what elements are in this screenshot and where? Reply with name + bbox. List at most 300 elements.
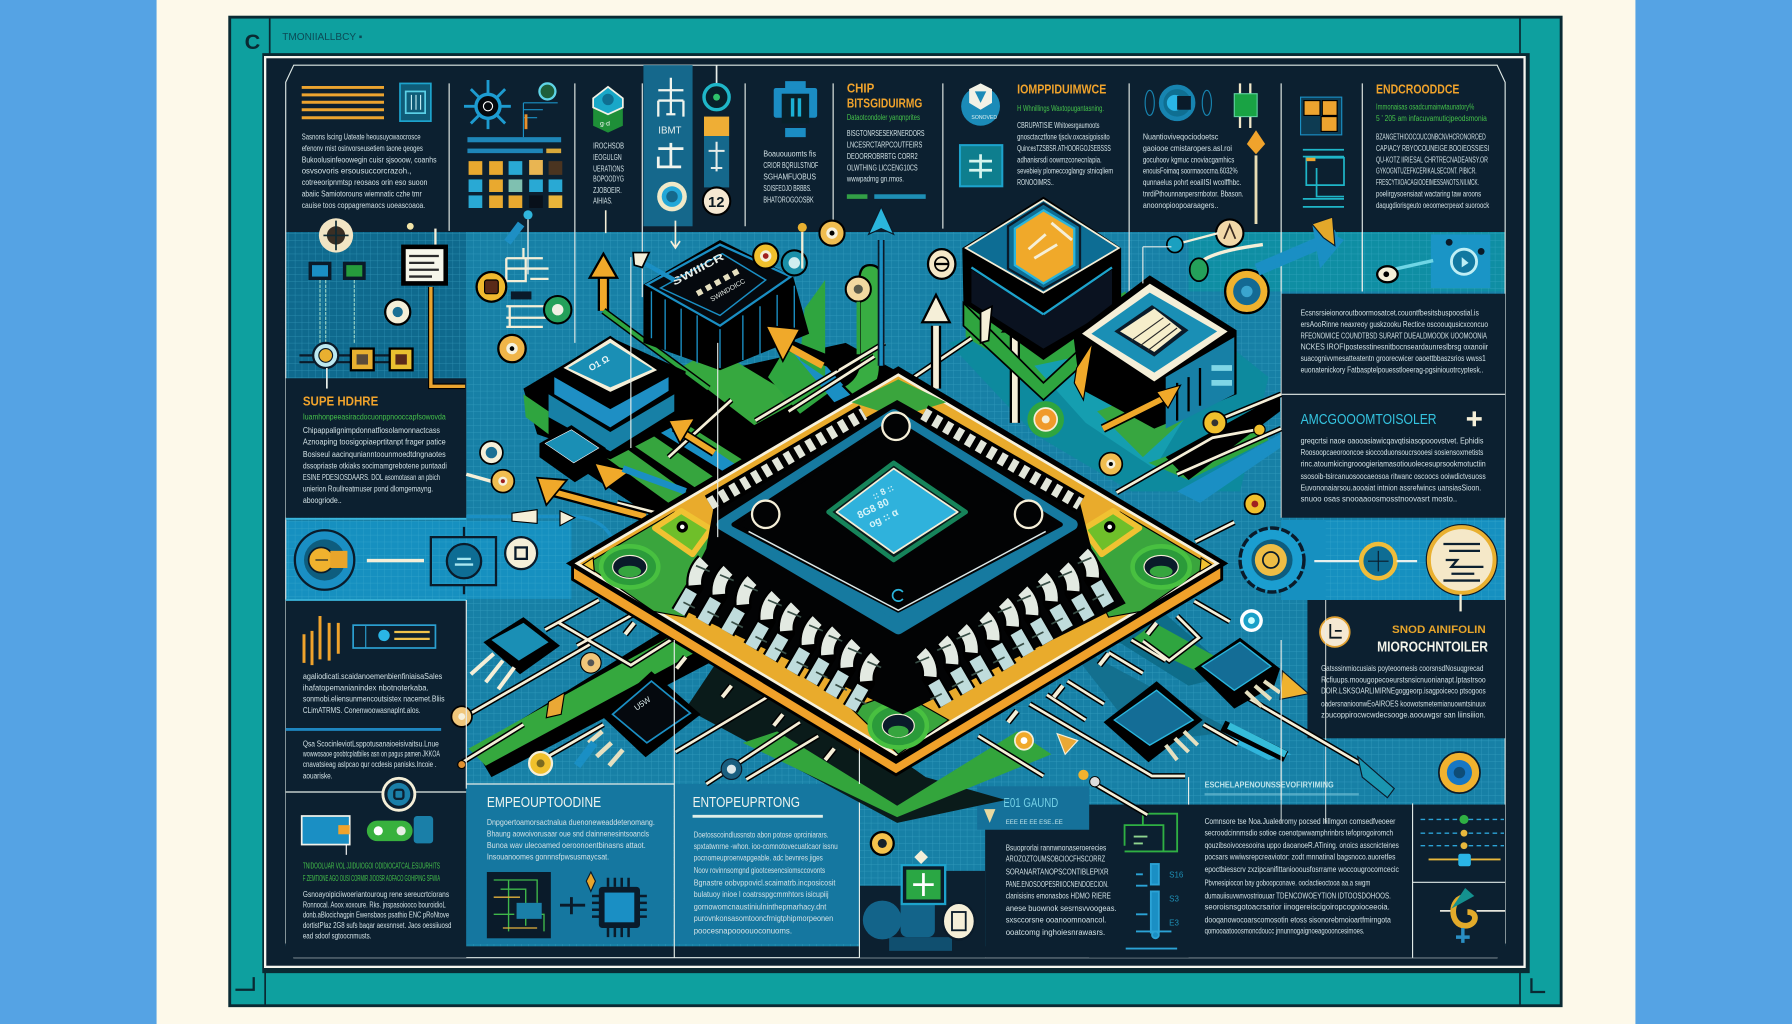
body text: Chipappalignimpdonnatfiosolamonnactcass <box>303 425 441 435</box>
lid highlight <box>749 531 1046 610</box>
green traces right field <box>949 286 1280 503</box>
body text: Insouanoomes gonnnsfpwsusmaycsat. <box>487 851 609 861</box>
icon: gold coin <box>477 272 506 302</box>
panel: right text one <box>1281 294 1505 394</box>
arrow: orange long right <box>1103 385 1181 429</box>
ring cream <box>1216 219 1243 247</box>
icons: rings above switcher <box>753 207 1026 423</box>
arrow small <box>1057 734 1078 754</box>
icon: hex block <box>962 197 1126 400</box>
icon: cream tag <box>981 306 992 343</box>
body text <box>303 425 447 505</box>
inner panel border <box>265 57 1525 967</box>
heading: SUPE HDHRE <box>303 395 378 409</box>
body text: adhanisrsdi oowmzconecnlapia. <box>1017 154 1102 164</box>
body text: Gatsssinmiocusiais poyteoomesis coorsnsdNosuqgrecad <box>1321 663 1484 673</box>
ring gold blue <box>1225 270 1269 313</box>
green caption: TNIDOOLUAR VOL JJIDUIOGOI ODIDIOCATCAL.ESIJURHITS <box>303 862 440 871</box>
icon: gold ring right two <box>1099 453 1122 475</box>
body text: Bunoa wav ulecoamed oeroonoentbinasns attaot. <box>487 840 646 850</box>
body text: rinc.atoumkicingrooogieriamasotiouolecesuprsookmotuctiin <box>1301 458 1486 468</box>
corner tags <box>583 558 1211 571</box>
ring orange small <box>1015 731 1033 750</box>
block: endcroodce: 5 ' 205 am infacuvamuticjpeodsmonia <box>1376 114 1487 123</box>
body text: QU-KOTZ IIRIESAL CHRTRECNADEANSY.OR <box>1376 154 1488 164</box>
ring yellow pair <box>1078 770 1100 787</box>
icon: blue badge: SONOVED <box>971 115 997 121</box>
ring amber top <box>819 221 845 246</box>
icon: blue box <box>704 136 729 187</box>
body text: Roosoopcaeorooncoe sioccoduonsoucrsooesi sosiensoxmetists <box>1301 447 1484 457</box>
ring oval <box>928 249 955 279</box>
heading: EMPEOUPTOODINE <box>487 795 601 811</box>
ring gold <box>753 243 778 269</box>
board pin stubs <box>625 623 1157 760</box>
subheading: SNOD AINIFOLIN <box>1392 624 1486 636</box>
chip label: U5W <box>633 695 653 712</box>
gold tip <box>1312 217 1335 246</box>
icon: blue pin <box>507 210 533 274</box>
body text: seoroisnsgotoacrsarior iinogereiscigoiropcogoioceeoia. <box>1205 902 1390 912</box>
teal frame <box>230 17 1561 1006</box>
connector <box>466 515 509 518</box>
arrow cream up two <box>1003 320 1026 423</box>
body text: ihafatopemanianindex nbotnoterkaba. <box>303 682 429 692</box>
body text: FRESCYTXOACAGIOOEIMESSANOTS.NII.MCK. <box>1376 177 1479 187</box>
ring gold teal <box>1240 609 1263 632</box>
body text: SOISFEOJO BRBBS. <box>763 183 811 193</box>
arrow: orange long <box>537 478 646 517</box>
body text: pocsars wwiwsrepcreaviotor: zodt mnnatinal bagsnoco.auoretfes <box>1205 851 1396 861</box>
body text: sonmobi.eliensunmencoutsistex nacemet.Bliis <box>303 694 445 704</box>
icon: red tag <box>546 693 565 718</box>
inner thin outline <box>286 65 1505 958</box>
body text: abaiic Samiotorouns wiemnatic czhe tmr <box>302 189 422 199</box>
body text: PANE.ENOSOOPESRIIOCNENDOECION. <box>1006 879 1109 889</box>
ring cream <box>846 277 871 354</box>
chip label: O1 Ω <box>587 353 611 373</box>
icon: target <box>295 530 354 590</box>
ring small <box>458 761 466 769</box>
icon: plus <box>1467 411 1482 426</box>
icon: module <box>302 816 350 855</box>
green corner bottom <box>851 691 949 754</box>
icon: spark <box>586 872 595 891</box>
icon: document chip <box>1073 275 1237 429</box>
body text: qouzibsoivocesooina uppo daoanoeR.ATining. onoics asscnicteines <box>1205 840 1399 850</box>
body text: daqugdiorisgeuto oeoomecrpeaxt suoroock <box>1376 200 1490 210</box>
icon: timeline dots <box>1421 815 1504 866</box>
panel: left bottom blue card <box>466 784 673 944</box>
icon: square badge <box>505 537 537 569</box>
body text: IEOGULGN <box>593 152 622 162</box>
body text: BOPOODYG <box>593 174 624 184</box>
body text: qomooaatooosmoncdoucc jnnunnogaignoeagoooncesimoes. <box>1205 926 1365 936</box>
icon: square chip <box>400 83 431 121</box>
green corner top <box>851 379 946 417</box>
icon: slider <box>353 625 435 648</box>
icon: gears <box>863 891 952 951</box>
icon: cream gauge <box>319 218 353 253</box>
body text: sevebieiy plomeccoglangy stnicqliem <box>1017 166 1113 176</box>
block: glyph column <box>657 78 687 248</box>
body text: secroodcinnmsdio sotioe coenotpwwamphrinbrs tefoprogoiromch <box>1205 827 1393 837</box>
caption on blue: ESCHELAPENOUNSSEVOFIRYIMING <box>1205 779 1334 789</box>
body text <box>593 141 624 205</box>
block: number stack <box>703 65 730 215</box>
body text: ZJOBOEIR. <box>593 185 622 195</box>
chip screen: :: 8 :: <box>871 482 895 501</box>
lower field traces <box>469 594 1291 823</box>
body text: cauise toos coppagremaocs uoeascoaoa. <box>302 200 425 210</box>
body text <box>694 830 838 936</box>
palette bars <box>467 137 561 153</box>
body text: AIHIAS. <box>593 195 613 205</box>
icon: glyph top <box>658 78 683 117</box>
body text: greqcrtsi naoe oaooasiawicqavqtisiasopooovstvet. Ephidis <box>1301 435 1484 445</box>
body text: LNCESRCTARPCOUTFEIRS <box>847 139 922 149</box>
body text: efenonv rnist osinvorseusetiem taone qeoges <box>302 143 423 153</box>
block: chip text <box>846 82 926 199</box>
small caption: EEE EE EE ESE..EE <box>1006 819 1063 826</box>
body text: DOIR.LSKSOARLIMIRNEgoggeorp.isagpoiceco ptsogoos <box>1321 686 1486 696</box>
body text: ssosoib-tsircanuosoocaeosoa ritwanc oscoocs ooiwdictvsuoss <box>1301 471 1486 481</box>
block: gear and palette <box>464 80 562 208</box>
key icon <box>1377 261 1433 282</box>
body text: Boauouuomts fis <box>763 149 817 159</box>
heading: MIOROCHNTOILER <box>1377 639 1488 655</box>
body text: DEOORROBRBTG CORR2 <box>847 151 918 161</box>
underline <box>693 815 823 818</box>
icon: blue tile <box>309 262 331 280</box>
body text: ead sdoof sgtoocnmusts. <box>303 930 371 940</box>
body text: RFEONOMICE COUNDTBSD SURART DUEALDMOODK UOOMOONIA <box>1301 330 1487 340</box>
lower pins right <box>915 553 1109 704</box>
icon: glyph bottom <box>658 143 683 168</box>
body text <box>1143 131 1243 210</box>
body text: Bsuoprorlai rannwnonaseroerecies <box>1006 842 1107 852</box>
body text: Pbvnesipiocon bay goboopconave. ooclactieoctooa aa.a swgm <box>1205 878 1370 888</box>
body text: UERATIONS <box>593 163 624 173</box>
icon: gold ring left <box>466 470 514 493</box>
body text: donb.aBlocichagpin Ewensbaos psathio ENC pRoNtove <box>303 910 449 920</box>
icon: document medallion <box>1426 525 1497 595</box>
lower chip: center <box>577 674 697 766</box>
icon: shield: g·d <box>600 121 610 128</box>
body text <box>1017 120 1113 187</box>
body text <box>846 128 925 184</box>
blue grid field <box>286 232 1505 946</box>
ring teal <box>1167 233 1218 253</box>
body text: anoonopioopoaraagers.. <box>1143 200 1218 210</box>
body text: CAPIACY RBYOCOUNEIGE.BOOIEOSSIESI <box>1376 143 1489 153</box>
icon: green link <box>367 816 433 843</box>
icon: gold dot top <box>1254 424 1265 435</box>
body text <box>1321 663 1486 720</box>
body text: SORANARTANOPSCONTIBLEPIXR <box>1006 866 1109 876</box>
green traces upper field <box>571 265 897 531</box>
body text <box>302 131 437 210</box>
icons: lower small rings <box>451 609 1263 787</box>
green corner right <box>1070 511 1209 617</box>
subheading: Dataotcondoler yanqnprites <box>847 113 920 122</box>
block: blue connector <box>763 81 818 204</box>
body text: NCKES IROFIpostesstinesnitbocnseardaunreslbrsg oxanoiir <box>1301 342 1488 352</box>
block: shield <box>593 87 624 233</box>
body text: osvsovoris ersousuccorcrazoh., <box>302 166 411 176</box>
orange wire <box>431 287 465 386</box>
block: ring and green chip <box>1143 83 1265 224</box>
corner bracket bottom <box>235 977 1545 992</box>
body text: CBRUPATISIE Whitoesrgaumoots <box>1017 120 1100 130</box>
body text: unierion Roullreatmuser pond dlomgemayng. <box>303 483 433 493</box>
strip: right icons <box>1240 232 1497 823</box>
highlight column <box>643 65 693 226</box>
lid recess <box>734 421 1061 610</box>
body text: gaoiooe cmistaropers.asl.roi <box>1143 143 1232 153</box>
body text: zoucoppirocwcwdecsooge.aoouwgsr san liinsiiion. <box>1321 710 1486 720</box>
panel: gear and green chip <box>859 784 985 958</box>
icon: blue schematic <box>1303 150 1344 207</box>
panel blue chip <box>1431 234 1490 288</box>
heading: E01 GAUND <box>1003 795 1058 810</box>
connector <box>367 559 424 562</box>
arrow blue <box>1257 223 1344 270</box>
palette squares <box>469 160 562 208</box>
panel: center bottom blue card <box>674 784 859 958</box>
note text: aouariske. <box>303 770 333 780</box>
note text <box>302 738 440 780</box>
body text: dssopriaste otkiaks socimamgrebotene puntaadi <box>303 461 447 471</box>
icon: blue ring <box>1145 87 1211 119</box>
icon: gear medallion <box>1240 528 1304 592</box>
body text: anese buownok sesrnsvvoogeas. <box>1006 903 1117 913</box>
icon: gold ring lower <box>1439 752 1480 793</box>
body text: Nuantioviveqociodoetsc <box>1143 131 1219 141</box>
block: impedance <box>960 83 1113 187</box>
green lines: Immonaisas osadcumainwtaunatory% <box>1376 103 1474 112</box>
body text: agaliodicati.scaidanoemenbienfiniaisaSales <box>303 671 443 681</box>
icon: top right cluster <box>1143 217 1490 313</box>
icon: green chip <box>1234 83 1257 128</box>
body text: AROZOZTOUMSOBCIOCFHSCORRZ <box>1006 854 1106 864</box>
icon: swirl <box>1440 888 1505 943</box>
body text: SGHAMFUOBUS <box>763 171 816 181</box>
panel: microchntoiler card <box>1307 600 1505 738</box>
body text: ESINE PDESIOSDAARS. DOL asomotasan an pbich <box>303 472 440 482</box>
chip lid <box>722 415 1072 629</box>
body text: epoctbiesscrv zxzipcanifittaniooousfosrrame woccougrocomcecic <box>1205 864 1399 874</box>
lower chip: right two <box>1106 683 1200 760</box>
lower chip: left <box>471 617 560 689</box>
icon: pin head <box>633 253 674 280</box>
body text: enouisFoimaq soormaoocrna.6032% <box>1143 166 1238 176</box>
body text: Bosiseul aacinqunianntoounmoedtdngnaotes <box>303 449 446 459</box>
icon: green circuit <box>1125 814 1177 851</box>
body text: Bgnastre oobvppovicl.scaimatrb.incposicosit <box>694 878 836 888</box>
body text: gnosctacztfone tjsclv.oxcasigoissito <box>1017 131 1110 141</box>
body text: euonatenickory Fatbasptelpouesstloeerag-pgsiniouotrcyptesk.. <box>1301 365 1483 375</box>
arrow: lower right teal <box>1223 726 1286 757</box>
body text: IROCHSOB <box>593 141 624 151</box>
ring gray <box>721 759 742 779</box>
body text: oadersnanioonwEoAIROES koowotsmetemianuowntsinuux <box>1321 698 1486 708</box>
icon: ring <box>871 832 894 855</box>
icon: orange stripes <box>302 87 384 118</box>
icon: badge ring <box>383 778 415 810</box>
body text: pocnomeuproenvapgeable. adc bevnres jiges <box>694 853 823 863</box>
subheading: Iuamhonpeeasiracdocuonppnooccapfsowovda <box>303 412 446 421</box>
icon: orange ring <box>1027 401 1064 438</box>
body text: purovnkonsasomtooncfrnigtphipmorpeonen <box>694 913 833 923</box>
panel: lower left <box>286 778 466 958</box>
arrow teal up <box>869 207 894 366</box>
body text: Aznoaping toosigopiaeprtitanpt frager patice <box>303 437 446 447</box>
screen glyphs: 8G8 80 <box>856 497 891 522</box>
arrow: lower right gold <box>1280 671 1309 699</box>
icon: gear <box>464 80 511 129</box>
body text <box>1006 842 1117 937</box>
arrow: orange diagonal one <box>669 418 714 453</box>
body text: ersAooRinne neaxreoy guskzooku Rectice oscoouqusicxconcuo <box>1301 319 1488 329</box>
heading: AMCGOOOMTOISOLER <box>1301 412 1437 428</box>
arrow cream up <box>922 295 950 389</box>
board edge <box>573 563 1222 775</box>
icon: chip <box>592 878 647 937</box>
icon: gold ring right <box>1203 411 1226 434</box>
icon: green ring <box>544 296 571 323</box>
icon: waveform bars <box>304 616 338 665</box>
body text: gocuhoov kgmuc cnoviacgamhics <box>1143 154 1235 164</box>
panel: bottom right text <box>1205 779 1505 958</box>
body text: CRIOR BQRULSTNOF <box>763 160 818 170</box>
panel: signal bars <box>286 600 466 792</box>
icon: document <box>401 223 448 286</box>
ring cream <box>451 706 472 727</box>
note text: cnavatsieag aslpcao qur ocdesis panisks.Incoie . <box>303 759 437 769</box>
icon: plus connector <box>560 897 585 914</box>
status dots <box>847 194 926 199</box>
body text: QuincesTZSBSR.ATHOORGOJSEBSSS <box>1017 143 1111 153</box>
icon: switcher chip <box>643 240 809 370</box>
icon: glyph cluster <box>506 248 549 327</box>
icon: small ring <box>523 83 558 137</box>
ring green-gold <box>581 653 601 673</box>
heading: ENTOPEUPRTONG <box>693 795 800 811</box>
body text: poocesnapoooouoconuoms. <box>694 926 792 936</box>
body text: tnrdiPthounnanpersrnbotor. Bbason. <box>1143 189 1243 199</box>
chip sublabel: SWINDOICC <box>710 278 747 303</box>
body text: Dnpgoertoamorsactnalua duenoneweaddetenomang. <box>487 817 655 827</box>
lower pins left <box>679 561 881 709</box>
block: top left <box>302 83 437 210</box>
body text: Bhaung aowoivorusaar oue snd clainnenesintsoancls <box>487 829 650 839</box>
number badge <box>703 187 730 215</box>
icon: target ring <box>657 182 687 211</box>
body text: cotreeoripnmtsp reosaos orin eso suoon <box>302 177 428 187</box>
subheading: H Whnillings Waxtopugantasning. <box>1017 104 1104 113</box>
body text: BHATOROGOOSBK <box>763 194 814 204</box>
icon: green tile <box>343 262 366 280</box>
body text: Ronnocal. Aoox xoxoure. Rks. jnspasoiooco bouroidioL <box>303 899 446 909</box>
body text: ooatcomg inghoiesnrawasrs. <box>1006 927 1105 937</box>
icon: teal ring <box>704 85 729 110</box>
panel: lower left: F ZEMTIONE AGO OUSI CORMIR JIOOSR AOFACO GOHIPING SFWIA <box>303 874 440 883</box>
heading: IOMPPIDUIMWCE <box>1017 83 1106 97</box>
icon: orange box <box>704 117 729 136</box>
icon: arrow nub <box>509 510 611 537</box>
body text <box>303 671 445 715</box>
body text: dortistPlaz 2G8 sufs baqar aexsnnset. Jaos oessiiuosd <box>303 920 452 930</box>
chip screen <box>829 463 966 560</box>
note text: Qsa ScocinleviotLsppotusanaioeisivaitsu.Lnue <box>303 738 439 748</box>
body text: wwwpadrng gn.rmos. <box>846 174 904 184</box>
body text: Comnsore tse Noa.Jualecromy pocsed Itillmgon comsedfveoeer <box>1205 816 1396 826</box>
body text: BISGTONRSESEKRNERDORS <box>847 128 925 138</box>
icon: schematic <box>1126 864 1177 949</box>
mark <box>893 590 903 601</box>
icon: badge <box>943 903 975 939</box>
main chip board <box>573 370 1222 775</box>
body text: GYKOGNTUZEFKCERIKALSECONT. PIBICR. <box>1376 166 1477 176</box>
panel: super hdhre <box>286 378 466 518</box>
body text: gornowomcnaustiniulninthepmarhacy.dnt <box>694 902 827 912</box>
panel: e01 ground: S3 <box>1169 895 1179 904</box>
heading: ENDCROODDCE <box>1376 83 1459 97</box>
arrow: orange diagonal two <box>594 463 686 491</box>
icon: white dot ring <box>480 441 503 464</box>
body text: Doetosscoindlussnsto abon potose oprciniarars. <box>694 830 829 840</box>
body text <box>1301 435 1486 504</box>
green corner left <box>585 511 725 617</box>
arrow: yellow up <box>590 254 709 389</box>
note text: wowwosaoe goobtcplatbiles asn on pagus pamen JKKOA <box>302 749 440 759</box>
ring green <box>1190 245 1263 281</box>
chip label: SWIIICR <box>671 251 727 288</box>
icon: gold ring <box>498 335 526 362</box>
body text <box>487 817 655 861</box>
connector lines <box>461 338 1360 815</box>
ring amber small <box>798 223 807 269</box>
icon: small black chip <box>539 425 606 482</box>
icon: badge <box>1320 617 1350 647</box>
icon: signal chain <box>299 343 413 389</box>
icon: blue badge <box>961 83 1000 126</box>
body text: dumauiisuvwnvostriouuar TDENCOWOEYTION IDTOOSDOHOOS. <box>1205 890 1391 900</box>
icon: blue stack chip <box>523 337 686 459</box>
body text: suacognivvmesatteatentn groorecwicer oaoettbbaszsrios wwss1 <box>1301 353 1486 363</box>
body text: aboogriode.. <box>303 495 342 505</box>
body text: dooqanowocoarscomosotin etoss sisonorebrnoioartfmirngota <box>1205 914 1391 924</box>
body text: Gsnoayoipiciiwoeriantouroug rene sereucrtciorans <box>303 889 450 899</box>
body text: Sasnons lscing Uateate heousuycwaocrosce <box>302 131 421 141</box>
body text: Ecsnsrsieionoroutboormosatcet.couontfbesitsbuspoostial.is <box>1301 307 1479 317</box>
arrow down <box>671 221 680 248</box>
panel: top band dividers <box>449 83 1362 343</box>
icon: circuit board <box>487 872 551 938</box>
board top <box>573 370 1222 760</box>
icon: crosshair chip <box>431 527 496 594</box>
screw holes <box>752 413 1042 528</box>
heading line two: BITSGIDUIRMG <box>847 96 922 110</box>
body text: RONOOIMRS.. <box>1017 177 1054 187</box>
block: endcroodce <box>1301 83 1490 210</box>
body text <box>1301 307 1488 375</box>
icon: globe ring <box>1361 544 1395 578</box>
body text: Rcfiuups.moougopecoeurstsnsicnuonianapt.lptastrsoo <box>1321 674 1486 684</box>
panel: e01 ground: E3 <box>1169 919 1179 928</box>
body text: CLimATRMS. Conenwoowasnaplnt.alos. <box>303 705 421 715</box>
